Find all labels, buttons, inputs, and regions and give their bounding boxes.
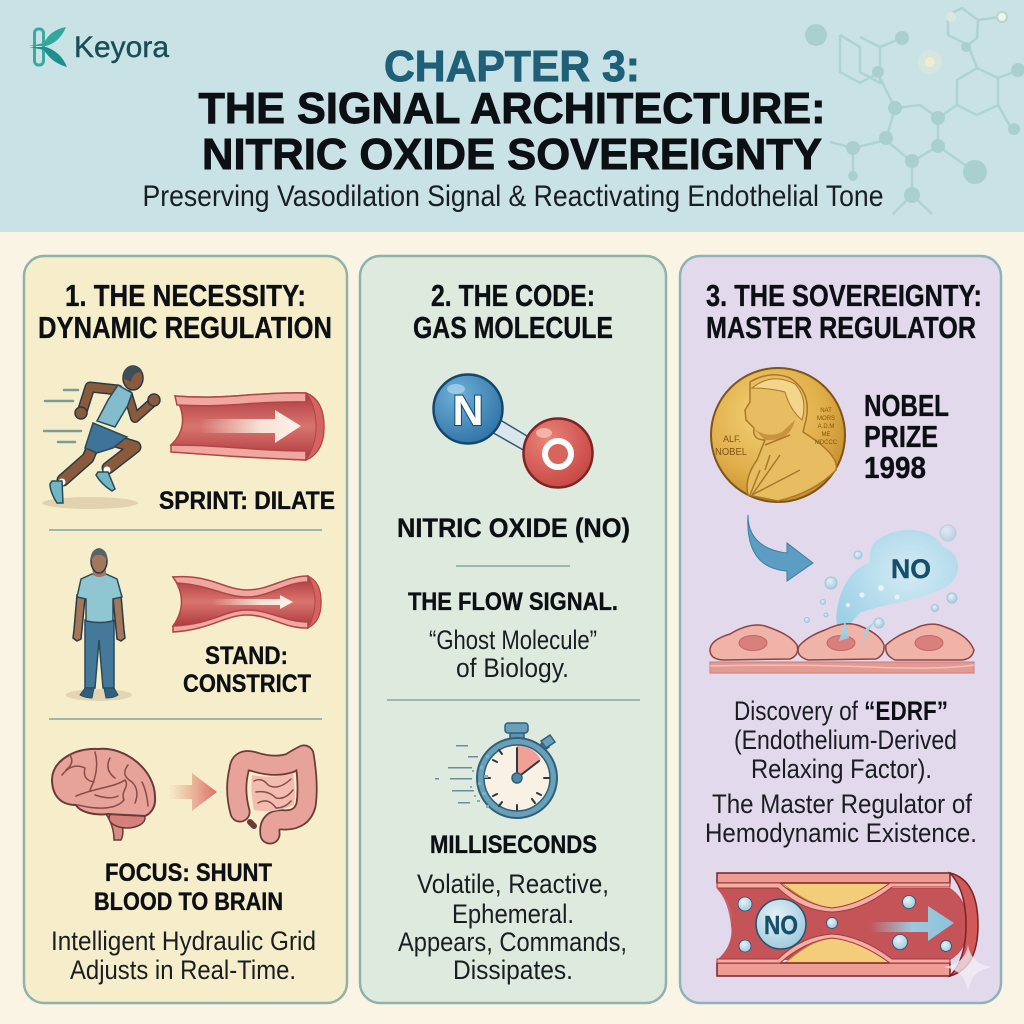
icon: constricted vessel <box>173 576 321 632</box>
text: master regulator: Hemodynamic Existence. <box>705 818 977 848</box>
text: intelligent hydraulic grid: Adjusts in Real-Time. <box>70 955 296 985</box>
title block: CHAPTER 3: <box>384 42 640 91</box>
heading: sovereignty: MASTER REGULATOR <box>706 311 976 345</box>
text: volatile description: Dissipates. <box>453 955 573 985</box>
label: nobel prize 1998 <box>864 389 949 485</box>
text: discovery of EDRF <box>734 696 957 784</box>
icon: nobel medal: NAT <box>820 408 832 414</box>
text: master regulator: The Master Regulator of <box>712 789 973 819</box>
icon: endothelial cells <box>710 620 974 673</box>
title block <box>198 42 826 179</box>
text: volatile description: Ephemeral. <box>452 899 574 929</box>
logo: Keyora <box>29 27 169 67</box>
panel: the code <box>360 256 666 1003</box>
label: nitric oxide: NITRIC OXIDE (NO) <box>397 513 630 543</box>
heading: sovereignty <box>706 279 982 345</box>
icon: nobel medal: ALF. <box>723 434 741 444</box>
heading: necessity: DYNAMIC REGULATION <box>38 311 332 345</box>
icon: NO molecule: N <box>452 387 484 435</box>
header band <box>0 0 1024 232</box>
text: intelligent hydraulic grid: Intelligent Hydraulic Grid <box>51 926 316 956</box>
icon: nobel medal: NOBEL <box>715 447 747 458</box>
label: nobel prize 1998: NOBEL <box>864 389 949 423</box>
icon: dilated vessel <box>171 393 324 460</box>
arrow: brain to gut <box>168 773 217 811</box>
label: nobel prize 1998: PRIZE <box>864 420 938 454</box>
text: volatile description: Volatile, Reactive, <box>417 869 609 899</box>
icon: sprinting runner <box>42 366 160 509</box>
label: stand constrict: CONSTRICT <box>183 670 311 698</box>
text: flow signal <box>408 588 618 683</box>
text: flow signal: THE FLOW SIGNAL. <box>408 588 618 616</box>
text: intelligent hydraulic grid <box>51 926 316 985</box>
icon: vessel with NO <box>717 873 978 976</box>
text: discovery of EDRF: (Endothelium-Derived <box>734 725 957 755</box>
caption: focus shunt blood: FOCUS: SHUNT <box>105 859 272 887</box>
panel: the necessity <box>24 256 347 1003</box>
text: flow signal: “Ghost Molecule” <box>429 625 597 655</box>
icon: standing man <box>66 549 132 701</box>
text: master regulator <box>705 789 977 848</box>
heading: necessity: 1. THE NECESSITY: <box>65 279 306 313</box>
icon: nobel medal: ME <box>822 432 830 438</box>
heading: code <box>413 279 613 345</box>
text: flow signal: of Biology. <box>456 653 569 683</box>
text: discovery of EDRF: Discovery of “EDRF” <box>734 696 948 726</box>
title block: NITRIC OXIDE SOVEREIGNTY <box>202 130 822 179</box>
text: discovery of EDRF: Relaxing Factor). <box>751 754 932 784</box>
label: stand constrict <box>183 642 311 698</box>
icon: intestines <box>237 755 307 834</box>
label: stand constrict: STAND: <box>205 642 288 670</box>
label: milliseconds: MILLISECONDS <box>430 831 597 859</box>
text: volatile description: Appears, Commands, <box>398 927 627 957</box>
decorative molecule network <box>805 8 1024 214</box>
icon: nobel medal <box>711 368 845 502</box>
icon: NO cloud: NO <box>891 554 931 584</box>
title block: THE SIGNAL ARCHITECTURE: <box>198 84 826 133</box>
caption: focus shunt blood: BLOOD TO BRAIN <box>94 888 283 916</box>
icon: NO molecule <box>434 374 592 488</box>
icon: stopwatch <box>435 723 557 818</box>
panel: the sovereignty <box>680 256 1001 1003</box>
caption: focus shunt blood <box>94 859 283 916</box>
heading: code: 2. THE CODE: <box>431 279 595 313</box>
icon: brain <box>52 749 155 840</box>
subtitle: Preserving Vasodilation Signal & Reactivating Endothelial Tone <box>142 180 884 213</box>
label: nobel prize 1998: 1998 <box>864 451 926 485</box>
icon: nobel medal: MDCCC <box>815 440 838 446</box>
text: volatile description <box>398 869 627 985</box>
icon: sparkle <box>944 945 992 992</box>
heading: code: GAS MOLECULE <box>413 311 613 345</box>
icon: NO cloud <box>804 525 958 637</box>
dissolving particles <box>470 755 489 808</box>
arrow: curved to NO cloud <box>748 515 813 581</box>
logo: Keyora: Keyora <box>74 31 169 64</box>
heading: necessity <box>38 279 332 345</box>
icon: nobel medal: A.D.M <box>818 424 834 430</box>
label: sprint dilate: SPRINT: DILATE <box>159 487 335 515</box>
icon: vessel with NO: NO <box>764 910 798 940</box>
icon: nobel medal: MORS <box>817 416 835 422</box>
